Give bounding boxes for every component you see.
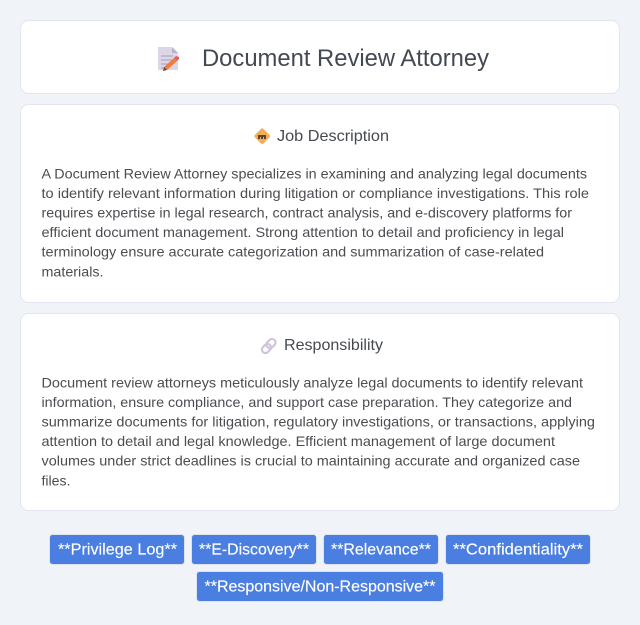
tag: relevance: **Relevance** <box>331 541 431 558</box>
tag: responsive/non-responsive: **Responsive/Non-Responsive** <box>204 578 436 595</box>
text block: responsibility: volumes under strict deadlines is crucial to maintaining accurate and organized case <box>42 453 580 469</box>
text block: job description: requires expertise in legal research, contract analysis, and e-discovery platforms for <box>42 204 572 220</box>
tag: privilege log <box>50 534 184 564</box>
text block: responsibility <box>42 374 595 488</box>
tag: responsive/non-responsive <box>196 572 444 602</box>
text block: job description: terminology ensure accurate categorization and summarization of case-related <box>42 244 544 260</box>
text block: responsibility: Document review attorneys meticulously analyze legal documents to identify relevant <box>42 374 583 390</box>
tag: e-discovery: **E-Discovery** <box>199 541 309 558</box>
text block: job description: to identify relevant information during litigation or compliance investigations. This role <box>42 185 589 201</box>
text block: responsibility: information, ensure compliance, and support case preparation. They categorize and <box>42 394 572 410</box>
panel: responsibility <box>20 314 620 510</box>
panel: title card <box>20 20 620 94</box>
text block: job description: materials. <box>42 263 104 279</box>
tag: confidentiality <box>446 534 590 564</box>
text block: job description: efficient document management. Strong attention to detail and proficiency in legal <box>42 224 564 240</box>
tag: confidentiality: **Confidentiality** <box>453 541 583 558</box>
text block: responsibility: summarize documents for litigation, regulatory investigations, or transactions, applying <box>42 414 595 430</box>
icon: document with pencil <box>158 47 179 71</box>
heading: responsibility: Responsibility <box>284 337 383 354</box>
text block: responsibility: attention to detail and legal knowledge. Efficient management of large document <box>42 433 555 449</box>
tag: privilege log: **Privilege Log** <box>58 541 177 558</box>
icon: orange diamond <box>254 128 271 145</box>
tag: relevance <box>324 534 438 564</box>
tags <box>50 534 590 602</box>
text block: responsibility: files. <box>42 472 70 488</box>
heading: job description: Job Description <box>277 128 389 145</box>
title: Document Review Attorney <box>202 45 490 72</box>
text block: job description <box>42 165 589 279</box>
panel: job description <box>20 104 620 302</box>
tag: e-discovery <box>192 534 316 564</box>
icon: chain link <box>260 337 277 355</box>
text block: job description: A Document Review Attorney specializes in examining and analyzing legal documents <box>42 165 587 181</box>
